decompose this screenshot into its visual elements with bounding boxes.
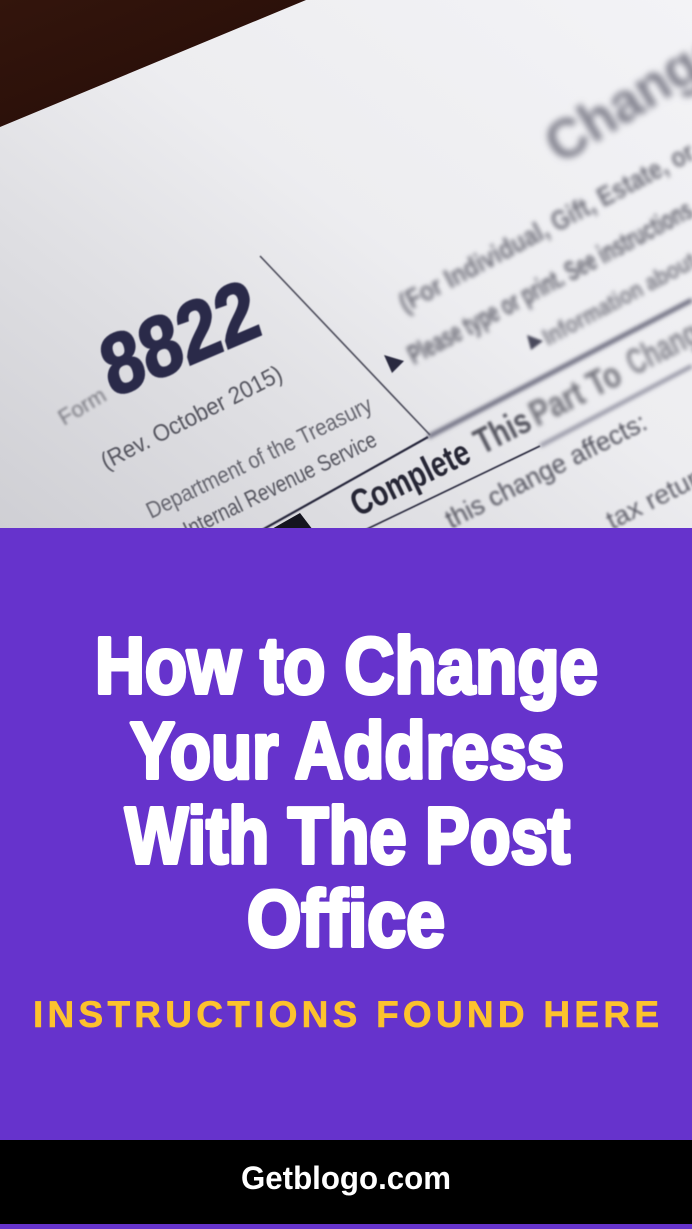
title: With The Post — [125, 791, 570, 880]
band heading: Part To — [522, 353, 628, 434]
form vertical rule — [260, 256, 430, 435]
footer bar — [0, 1140, 692, 1224]
title — [95, 621, 598, 963]
paper sheet — [0, 0, 692, 528]
band heading: This — [467, 399, 537, 462]
revision date: (Rev. October 2015) — [96, 360, 287, 475]
band heading: Complete — [344, 431, 477, 524]
band heading — [344, 306, 692, 524]
purple panel — [0, 528, 692, 1140]
form number 8822: 8822 — [90, 261, 269, 415]
department line: Department of the Treasury — [142, 391, 376, 523]
label: Form: Form — [54, 382, 111, 430]
wooden table corner — [0, 0, 306, 127]
footer site name: Getblogo.com — [241, 1160, 451, 1196]
band rules — [262, 300, 692, 530]
title: Your Address — [130, 706, 564, 795]
title: How to Change — [95, 621, 598, 710]
subtitle: INSTRUCTIONS FOUND HERE — [33, 994, 659, 1035]
black part label — [270, 513, 313, 530]
arrow two — [527, 335, 543, 350]
title and subtitle text — [33, 621, 659, 1035]
arrow one — [384, 355, 404, 373]
title: Office — [247, 874, 445, 963]
photo: Form 8822 close-up — [0, 0, 692, 528]
